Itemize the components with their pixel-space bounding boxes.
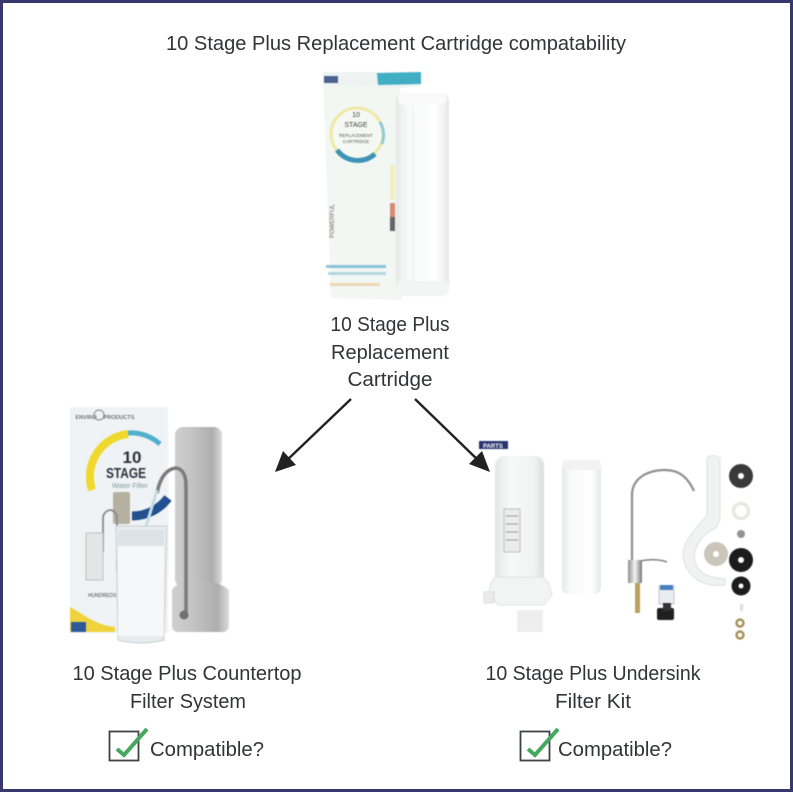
retail box: [70, 407, 168, 633]
cartridge label: Cartridge: [348, 369, 432, 391]
compatibility check: undersink: Compatible?: [558, 739, 672, 761]
water valve: [659, 586, 674, 604]
gray filter housing: [175, 427, 222, 587]
undersink label: [486, 663, 701, 713]
product image: replacement cartridge box and cartridge: REPLACEMENT: [339, 133, 373, 138]
washer: beige disc: [704, 542, 728, 566]
white cartridge: [396, 93, 449, 296]
product image: undersink filter kit: [479, 441, 753, 638]
cartridge label: 10 Stage Plus: [330, 314, 450, 336]
faucet spout: [157, 468, 186, 612]
product image: replacement cartridge box and cartridge: [323, 72, 449, 300]
water glass: [116, 526, 167, 643]
undersink label: Filter Kit: [555, 691, 631, 713]
title: 10 Stage Plus Replacement Cartridge compatability: [166, 33, 626, 55]
countertop label: Filter System: [130, 691, 246, 713]
countertop label: 10 Stage Plus Countertop: [72, 663, 302, 685]
product image: countertop filter system: ENVIRO: [75, 415, 97, 421]
cartridge label: [330, 314, 450, 391]
white filter cartridge: [562, 460, 601, 594]
black washers: [729, 464, 753, 488]
arrow: to undersink kit: [415, 399, 490, 472]
cartridge label: Replacement: [331, 342, 449, 364]
compatibility check: countertop: Compatible?: [150, 739, 264, 761]
arrow: to countertop system: [275, 399, 351, 472]
filter housing: [495, 456, 544, 591]
product image: countertop filter system: [70, 407, 229, 643]
product image: undersink filter kit: PARTS: [483, 444, 503, 450]
product image: replacement cartridge box and cartridge: 10: [352, 112, 360, 119]
wrench: [683, 456, 725, 586]
parts tag: [479, 441, 508, 449]
undersink label: 10 Stage Plus Undersink: [486, 663, 701, 685]
chrome faucet: [632, 470, 694, 560]
countertop label: [72, 663, 302, 713]
compatibility check: undersink: [520, 729, 672, 761]
product image: replacement cartridge box and cartridge: CARTRIDGE: [343, 139, 369, 144]
product image: countertop filter system: STAGE: [106, 465, 146, 482]
brass nuts: [736, 620, 744, 626]
product image: replacement cartridge box and cartridge: STAGE: [344, 122, 368, 129]
cartridge box front: [323, 75, 402, 300]
product image: countertop filter system: Water Filter: [112, 483, 149, 490]
compatibility check: countertop: [110, 729, 264, 761]
product image: countertop filter system: 10: [123, 448, 141, 467]
product image: replacement cartridge box and cartridge: POWERFUL: [330, 203, 336, 238]
product image: countertop filter system: HUNDREDS: [88, 593, 117, 599]
product image: countertop filter system: PRODUCTS: [104, 415, 135, 421]
